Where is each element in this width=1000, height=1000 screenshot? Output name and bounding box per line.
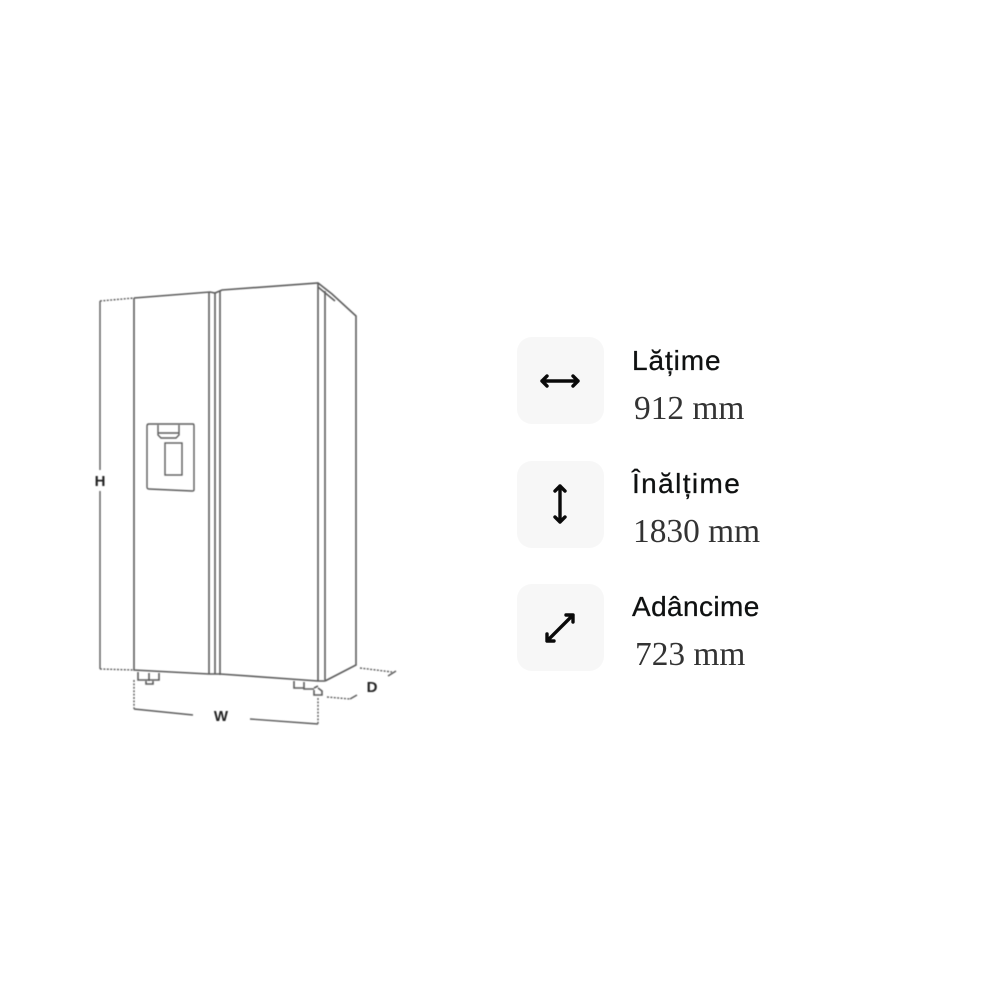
height dimension line bbox=[100, 298, 134, 670]
label: width: Lățime bbox=[632, 345, 721, 376]
dimension letter H: H bbox=[95, 473, 105, 490]
value: height: 1830 mm bbox=[633, 513, 760, 550]
dispenser bbox=[147, 424, 194, 491]
value: depth: 723 mm bbox=[635, 636, 745, 673]
icon: depth arrow bbox=[517, 584, 604, 671]
dimension letter D: D bbox=[367, 679, 378, 696]
label: height: Înălțime bbox=[632, 468, 741, 499]
feet bbox=[138, 672, 159, 684]
label: depth: Adâncime bbox=[632, 591, 760, 622]
icon: height arrow bbox=[517, 461, 604, 548]
value: width: 912 mm bbox=[634, 390, 744, 427]
fridge body bbox=[134, 283, 356, 695]
dimension letter W: W bbox=[214, 708, 229, 725]
depth dimension line bbox=[327, 668, 396, 699]
icon: width arrow bbox=[517, 337, 604, 424]
width dimension line bbox=[134, 680, 318, 724]
